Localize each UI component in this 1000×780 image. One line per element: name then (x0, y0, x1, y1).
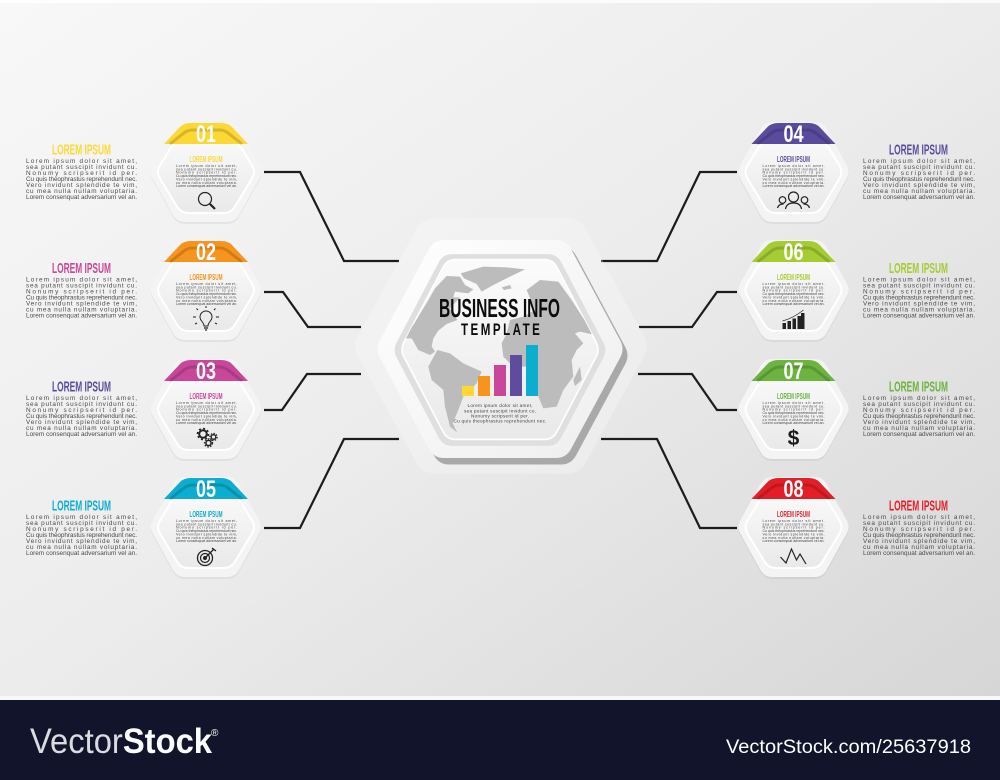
left text block 1: Vero invidunt splendide te vim, (26, 182, 137, 189)
card 04: LOREM IPSUM (777, 155, 810, 164)
card 05 (151, 476, 261, 579)
card 01: Nonumy scripserit id per. (176, 171, 237, 175)
left text block 1: Lorem consenquat adversarium vel an. (26, 194, 137, 201)
central hexagon (378, 240, 640, 464)
right text block 2: cu mea nulla nullam voluptaria. (863, 306, 975, 314)
registered mark: ® (211, 728, 219, 739)
right text block 1: LOREM IPSUM (889, 142, 948, 158)
card 03 (151, 358, 261, 461)
left text block 4: Cu quis theophrastus reprehendunt nec. (26, 532, 137, 539)
card 05: cu mea nulla nullam voluptaria. (176, 536, 237, 540)
card 06: 06 (784, 239, 804, 266)
icon: light bulb (193, 306, 219, 330)
right text block 4: Lorem consenquat adversarium vel an. (863, 550, 975, 557)
card 01: LOREM IPSUM (190, 155, 223, 164)
left text block 3: Lorem ipsum dolor sit amet, (26, 395, 137, 402)
right text block 3: cu mea nulla nullam voluptaria. (863, 425, 975, 432)
card 03: Vero invidunt splendide te vim, (176, 414, 237, 418)
icon: zigzag line (780, 549, 806, 564)
right text block 3: LOREM IPSUM (889, 378, 948, 396)
card 03: sea putant suscipit invidunt cu. (176, 404, 237, 408)
card 06: cu mea nulla nullam voluptaria. (762, 299, 824, 303)
card 06: Vero invidunt splendide te vim, (762, 296, 824, 300)
card 05: Lorem consenquat adversarium vel an. (176, 539, 237, 543)
card 04: Vero invidunt splendide te vim, (762, 178, 824, 182)
card 06: Nonumy scripserit id per. (762, 289, 824, 293)
card 02: Vero invidunt splendide te vim, (176, 296, 237, 300)
card 02: Lorem consenquat adversarium vel an. (176, 302, 237, 306)
card 08: 08 (784, 476, 804, 503)
card 07: Vero invidunt splendide te vim, (762, 414, 824, 418)
right text block 1: Cu quis theophrastus reprehendunt nec. (863, 176, 975, 183)
card 01: Vero invidunt splendide te vim, (176, 178, 237, 182)
card 01: 01 (196, 121, 216, 148)
right text block 1: Lorem ipsum dolor sit amet, (863, 158, 975, 165)
card 02: sea putant suscipit invidunt cu. (176, 285, 237, 289)
right text block 1 (863, 142, 975, 201)
card 07: Lorem ipsum dolor sit amet, (762, 401, 824, 405)
left text block 3 (26, 378, 137, 438)
card 07: cu mea nulla nullam voluptaria. (762, 418, 824, 422)
card 03: Lorem consenquat adversarium vel an. (176, 421, 237, 425)
icon: gears (198, 428, 217, 447)
left text block 2: Lorem ipsum dolor sit amet, (26, 276, 137, 284)
right text block 2: Cu quis theophrastus reprehendunt nec. (863, 294, 975, 302)
left text block 2: cu mea nulla nullam voluptaria. (26, 306, 137, 314)
right text block 4: Cu quis theophrastus reprehendunt nec. (863, 532, 975, 539)
right text block 2: LOREM IPSUM (889, 260, 948, 277)
left text block 4: Vero invidunt splendide te vim, (26, 538, 137, 545)
title: BUSINESS INFO (439, 293, 560, 323)
right text block 3: Cu quis theophrastus reprehendunt nec. (863, 413, 975, 420)
card 04: Cu quis theophrastus reprehendunt nec. (762, 174, 824, 178)
right text block 1: Vero invidunt splendide te vim, (863, 182, 975, 189)
central text: Nonumy scripserit id per. (471, 414, 529, 418)
card 04: Nonumy scripserit id per. (762, 171, 824, 175)
left text block 2: Nonumy scripserit id per. (26, 288, 137, 296)
card 05: Nonumy scripserit id per. (176, 526, 237, 530)
card 01: Lorem ipsum dolor sit amet, (176, 164, 237, 168)
card 05: Cu quis theophrastus reprehendunt nec. (176, 529, 237, 533)
card 05: LOREM IPSUM (190, 510, 223, 519)
card 05: Lorem ipsum dolor sit amet, (176, 519, 237, 523)
right text block 1: Nonumy scripserit id per. (863, 170, 975, 177)
card 02 (151, 239, 261, 342)
right text block 2: Lorem ipsum dolor sit amet, (863, 276, 975, 284)
footer id: VectorStock.com/25637918 (726, 737, 971, 758)
right text block 2 (863, 260, 975, 320)
bar chart (462, 345, 538, 396)
left text block 1: cu mea nulla nullam voluptaria. (26, 188, 137, 195)
card 05: 05 (196, 476, 216, 503)
right text block 3: Lorem consenquat adversarium vel an. (863, 431, 975, 438)
card 08: Cu quis theophrastus reprehendunt nec. (762, 529, 824, 533)
right text block 4: Nonumy scripserit id per. (863, 526, 975, 533)
card 08: sea putant suscipit invidunt cu. (762, 522, 824, 526)
left text block 4: cu mea nulla nullam voluptaria. (26, 544, 137, 551)
left text block 3: Cu quis theophrastus reprehendunt nec. (26, 413, 137, 420)
left text block 3: sea putant suscipit invidunt cu. (26, 401, 137, 408)
card 03: 03 (196, 358, 216, 385)
right text block 1: sea putant suscipit invidunt cu. (863, 164, 975, 171)
card 02: Nonumy scripserit id per. (176, 289, 237, 293)
footer logo: VectorStock (30, 722, 212, 761)
left text block 3: Nonumy scripserit id per. (26, 407, 137, 414)
left text block 1: LOREM IPSUM (52, 142, 111, 158)
title: TEMPLATE (461, 321, 540, 340)
card 02: Cu quis theophrastus reprehendunt nec. (176, 292, 237, 296)
card 02: cu mea nulla nullam voluptaria. (176, 299, 237, 303)
icon: growth chart (782, 310, 804, 329)
left text block 4 (26, 498, 137, 557)
card 03: LOREM IPSUM (190, 392, 223, 401)
card 08: Nonumy scripserit id per. (762, 526, 824, 530)
left text block 1: Lorem ipsum dolor sit amet, (26, 158, 137, 165)
left text block 1: sea putant suscipit invidunt cu. (26, 164, 137, 171)
right text block 3: Nonumy scripserit id per. (863, 407, 975, 414)
right text block 3: Vero invidunt splendide te vim, (863, 419, 975, 426)
card 08 (738, 476, 848, 579)
left text block 3: Lorem consenquat adversarium vel an. (26, 431, 137, 438)
right text block 4 (863, 498, 975, 557)
left text block 2: Lorem consenquat adversarium vel an. (26, 312, 137, 320)
card 07: LOREM IPSUM (777, 392, 810, 401)
central text: sea putant suscipit invidunt cu. (464, 408, 536, 413)
right text block 4: Lorem ipsum dolor sit amet, (863, 514, 975, 521)
card 06: Cu quis theophrastus reprehendunt nec. (762, 292, 824, 296)
card 06: sea putant suscipit invidunt cu. (762, 285, 824, 289)
left text block 4: Nonumy scripserit id per. (26, 526, 137, 533)
card 07: sea putant suscipit invidunt cu. (762, 404, 824, 408)
right text block 2: Vero invidunt splendide te vim, (863, 300, 975, 308)
left text block 4: Lorem consenquat adversarium vel an. (26, 550, 137, 557)
left text block 1 (26, 142, 137, 201)
card 08: Vero invidunt splendide te vim, (762, 532, 824, 536)
card 02: 02 (196, 239, 216, 266)
card 06: LOREM IPSUM (777, 273, 810, 282)
left text block 2 (26, 260, 137, 320)
card 02: LOREM IPSUM (190, 273, 223, 282)
card 01: cu mea nulla nullam voluptaria. (176, 181, 237, 185)
icon: magnifier (198, 192, 215, 209)
right text block 2: sea putant suscipit invidunt cu. (863, 282, 975, 290)
card 04: Lorem consenquat adversarium vel an. (762, 184, 824, 188)
card 08: cu mea nulla nullam voluptaria. (762, 536, 824, 540)
left text block 2: Vero invidunt splendide te vim, (26, 300, 137, 308)
left text block 3: Vero invidunt splendide te vim, (26, 419, 137, 426)
card 07 (738, 358, 848, 461)
card 06 (738, 239, 848, 342)
left text block 4: sea putant suscipit invidunt cu. (26, 520, 137, 527)
card 07: Lorem consenquat adversarium vel an. (762, 421, 824, 425)
right text block 3 (863, 378, 975, 438)
left text block 3: cu mea nulla nullam voluptaria. (26, 425, 137, 432)
left text block 2: LOREM IPSUM (52, 260, 111, 277)
connector lines (264, 172, 737, 528)
right text block 3: Lorem ipsum dolor sit amet, (863, 395, 975, 402)
icon: target (198, 548, 216, 566)
central text: Cu quis theophrastus reprehendunt nec. (454, 418, 546, 424)
card 01: Lorem consenquat adversarium vel an. (176, 184, 237, 188)
card 03: Nonumy scripserit id per. (176, 408, 237, 412)
right text block 4: LOREM IPSUM (889, 498, 948, 514)
right text block 4: Vero invidunt splendide te vim, (863, 538, 975, 545)
title (439, 293, 560, 340)
right text block 2: Nonumy scripserit id per. (863, 288, 975, 296)
card 01: sea putant suscipit invidunt cu. (176, 167, 237, 171)
card 05: Vero invidunt splendide te vim, (176, 532, 237, 536)
card 04: sea putant suscipit invidunt cu. (762, 167, 824, 171)
card 08: LOREM IPSUM (777, 510, 810, 519)
right text block 4: sea putant suscipit invidunt cu. (863, 520, 975, 527)
card 03: Cu quis theophrastus reprehendunt nec. (176, 411, 237, 415)
icon: people (778, 192, 810, 209)
card 01 (151, 121, 261, 224)
left text block 1: Cu quis theophrastus reprehendunt nec. (26, 176, 137, 183)
card 03: cu mea nulla nullam voluptaria. (176, 418, 237, 422)
central text (454, 403, 546, 424)
right text block 1: Lorem consenquat adversarium vel an. (863, 194, 975, 201)
card 07: Nonumy scripserit id per. (762, 408, 824, 412)
icon: dollar: $ (788, 427, 800, 450)
right text block 4: cu mea nulla nullam voluptaria. (863, 544, 975, 551)
card 04: cu mea nulla nullam voluptaria. (762, 181, 824, 185)
left text block 4: Lorem ipsum dolor sit amet, (26, 514, 137, 521)
card 08: Lorem ipsum dolor sit amet, (762, 519, 824, 523)
card 04: Lorem ipsum dolor sit amet, (762, 164, 824, 168)
card 06: Lorem consenquat adversarium vel an. (762, 302, 824, 306)
card 02: Lorem ipsum dolor sit amet, (176, 282, 237, 286)
right text block 1: cu mea nulla nullam voluptaria. (863, 188, 975, 195)
card 07: 07 (784, 358, 804, 385)
left text block 4: LOREM IPSUM (52, 498, 111, 514)
right text block 2: Lorem consenquat adversarium vel an. (863, 312, 975, 320)
central text: Lorem ipsum dolor sit amet, (468, 403, 532, 408)
left text block 2: sea putant suscipit invidunt cu. (26, 282, 137, 290)
card 01: Cu quis theophrastus reprehendunt nec. (176, 174, 237, 178)
footer bar (0, 700, 1000, 780)
card 08: Lorem consenquat adversarium vel an. (762, 539, 824, 543)
card 07: Cu quis theophrastus reprehendunt nec. (762, 411, 824, 415)
card 04 (738, 121, 848, 224)
left text block 2: Cu quis theophrastus reprehendunt nec. (26, 294, 137, 302)
card 03: Lorem ipsum dolor sit amet, (176, 401, 237, 405)
left text block 1: Nonumy scripserit id per. (26, 170, 137, 177)
left text block 3: LOREM IPSUM (52, 378, 111, 396)
card 04: 04 (784, 121, 804, 148)
card 06: Lorem ipsum dolor sit amet, (762, 282, 824, 286)
world map (403, 267, 595, 433)
right text block 3: sea putant suscipit invidunt cu. (863, 401, 975, 408)
card 05: sea putant suscipit invidunt cu. (176, 522, 237, 526)
